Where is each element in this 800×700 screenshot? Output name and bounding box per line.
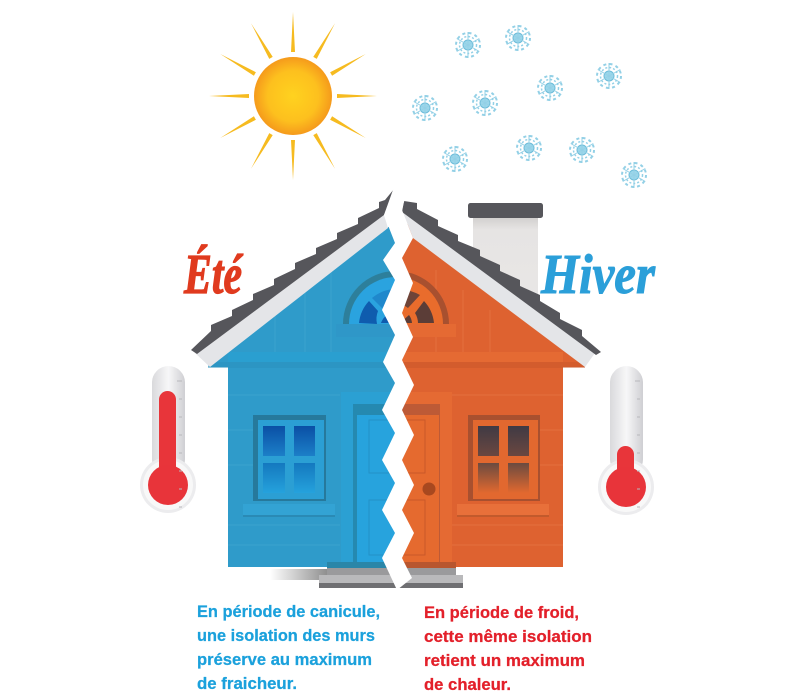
door, orange side [400, 392, 452, 562]
winter half: orange walls [400, 218, 585, 567]
icons: snowflakes [413, 25, 646, 188]
text block: winter: En période de froid, [424, 604, 579, 622]
left roof [191, 189, 394, 367]
right window [457, 415, 549, 517]
text block: winter [424, 604, 592, 694]
crack down the middle [382, 187, 414, 590]
right roof [402, 201, 601, 367]
heading: Été: Été [183, 244, 244, 306]
left window [243, 415, 335, 517]
text block: winter: retient un maximum [424, 652, 585, 670]
text block: summer: En période de canicule, [197, 603, 380, 621]
attic window, blue side [336, 271, 396, 337]
heading: Hiver: Hiver [540, 244, 656, 306]
right thermometer: low reading [598, 366, 654, 515]
text block: summer: préserve au maximum [197, 651, 372, 669]
text block: winter: cette même isolation [424, 628, 592, 646]
left thermometer: high reading [140, 366, 196, 513]
chimney [468, 203, 543, 306]
summer half: blue walls [208, 218, 400, 567]
door steps [270, 562, 463, 588]
house split in two [191, 187, 601, 590]
text block: summer: de fraicheur. [197, 675, 297, 693]
text block: summer: une isolation des murs [197, 627, 375, 645]
attic window, orange side [396, 271, 456, 337]
icon: sun [209, 12, 377, 180]
text block: winter: de chaleur. [424, 676, 511, 694]
door, blue side [341, 392, 400, 562]
text block: summer [197, 603, 380, 693]
